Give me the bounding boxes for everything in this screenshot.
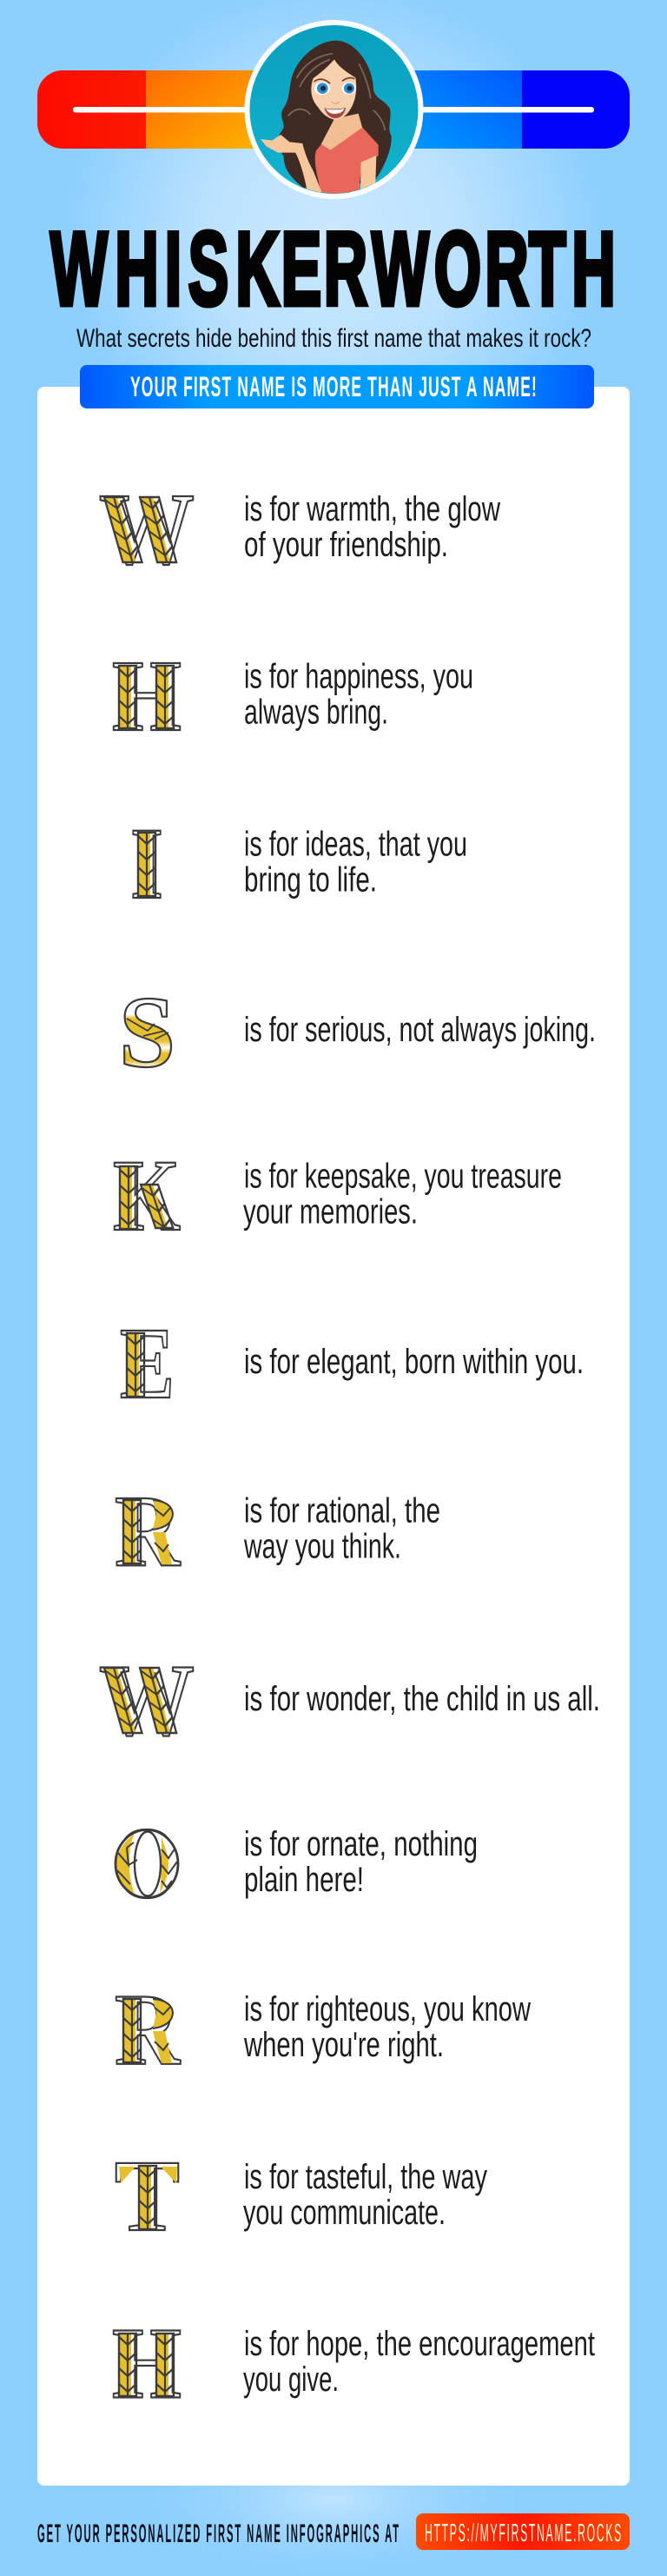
letter R: R	[115, 1474, 182, 1588]
text: ideas	[244, 826, 467, 899]
row 3: I	[130, 807, 467, 920]
letter K: K	[113, 1139, 181, 1252]
text: ornate: plain here!	[244, 1861, 364, 1899]
text: happiness: always bring.	[244, 694, 388, 732]
letter I: I	[130, 807, 163, 920]
row 7: R	[115, 1474, 440, 1588]
ribbon orange section	[146, 70, 254, 149]
text: hope	[243, 2325, 595, 2399]
row 5: K	[113, 1139, 562, 1252]
letter R: R	[115, 1973, 182, 2086]
text: ideas: is for ideas, that you	[244, 826, 467, 864]
ribbon light blue section	[413, 70, 522, 149]
text: keepsake: your memories.	[243, 1192, 418, 1231]
row 10: R	[115, 1973, 531, 2086]
row 4: S	[119, 975, 596, 1089]
avatar circle	[247, 23, 420, 196]
text: warmth: is for warmth, the glow	[244, 490, 500, 528]
letter E: E	[120, 1306, 175, 1420]
row 1: W	[99, 472, 500, 586]
row 8: W	[99, 1643, 600, 1757]
banner	[80, 365, 594, 408]
text: tasteful	[243, 2158, 487, 2232]
letter W: W	[99, 1643, 195, 1757]
letter S: S	[119, 975, 175, 1089]
avatar woman illustration	[261, 41, 392, 194]
row 11: T	[115, 2139, 487, 2253]
text: rational: way you think.	[243, 1528, 401, 1566]
row 2: H	[112, 639, 473, 753]
text: ornate	[244, 1825, 478, 1899]
avatar portrait	[247, 23, 420, 196]
row 12: H	[112, 2307, 595, 2420]
ribbon deep blue section	[522, 70, 630, 149]
text: warmth: of your friendship.	[244, 526, 448, 564]
banner background	[80, 365, 594, 408]
letter W: W	[99, 472, 195, 586]
text: righteous: is for righteous, you know	[244, 1990, 531, 2028]
text: rational	[243, 1491, 440, 1566]
row 9: O	[115, 1806, 478, 1920]
text: rational: is for rational, the	[244, 1491, 440, 1530]
header ribbon	[37, 70, 630, 149]
text: happiness	[244, 657, 473, 732]
letter T: T	[115, 2139, 180, 2253]
footer link button	[416, 2513, 630, 2550]
letter O: O	[115, 1806, 179, 1920]
text: ornate: is for ornate, nothing	[244, 1825, 478, 1863]
ribbon white line	[73, 107, 594, 113]
text: keepsake	[243, 1158, 562, 1231]
footer	[37, 2513, 630, 2550]
row 6: E	[120, 1306, 584, 1420]
text: tasteful: you communicate.	[243, 2194, 446, 2232]
ribbon red section	[37, 70, 146, 149]
letter H: H	[112, 2307, 182, 2420]
text: righteous	[243, 1990, 531, 2064]
white content panel	[37, 387, 630, 2486]
text: righteous: when you're right.	[243, 2026, 444, 2064]
title: WHISKERWORTH	[50, 210, 616, 327]
letter H: H	[112, 639, 182, 753]
text: tasteful: is for tasteful, the way	[244, 2158, 487, 2196]
text: warmth	[244, 490, 500, 564]
text: ideas: bring to life.	[244, 860, 377, 899]
text: hope: you give.	[243, 2360, 339, 2399]
text: happiness: is for happiness, you	[244, 657, 473, 695]
